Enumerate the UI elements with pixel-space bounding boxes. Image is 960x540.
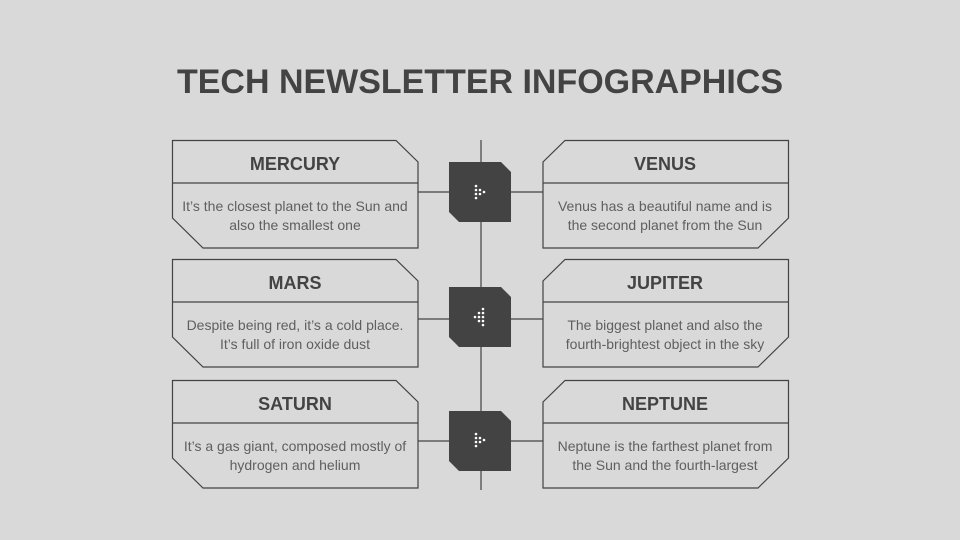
panel: mars: Despite being red, it’s a cold place. <box>187 317 403 333</box>
icon: square 3 <box>449 411 511 471</box>
icon: square 1 <box>449 162 511 222</box>
panel: mars: MARS <box>268 273 322 293</box>
panel: venus: VENUS <box>634 154 696 174</box>
panel: mercury: It’s the closest planet to the Sun and <box>182 198 408 214</box>
title: TECH NEWSLETTER INFOGRAPHICS <box>177 63 783 101</box>
panel: saturn <box>172 380 418 488</box>
panel: saturn: hydrogen and helium <box>230 457 360 473</box>
panel: mercury: also the smallest one <box>229 217 361 233</box>
panel: jupiter: JUPITER <box>627 273 703 293</box>
panel: venus: the second planet from the Sun <box>568 217 762 233</box>
panel: jupiter <box>543 260 789 367</box>
panel: neptune <box>543 380 789 488</box>
panel: venus <box>543 140 789 248</box>
panel: saturn: SATURN <box>258 394 332 414</box>
panel: mercury <box>172 140 418 248</box>
panel: neptune: Neptune is the farthest planet from <box>558 438 772 454</box>
panel: neptune: NEPTUNE <box>622 394 708 414</box>
icon: square 2 <box>449 287 511 347</box>
panel: mars: It’s full of iron oxide dust <box>220 336 370 352</box>
panel: mars <box>172 260 418 367</box>
panel: jupiter: The biggest planet and also the <box>567 317 763 333</box>
panel: neptune: the Sun and the fourth-largest <box>572 457 758 473</box>
panel: saturn: It’s a gas giant, composed mostly of <box>184 438 406 454</box>
panel: venus: Venus has a beautiful name and is <box>558 198 772 214</box>
connector lines <box>418 140 543 490</box>
panel: mercury: MERCURY <box>250 154 340 174</box>
panel: jupiter: fourth-brightest object in the sky <box>566 336 764 352</box>
